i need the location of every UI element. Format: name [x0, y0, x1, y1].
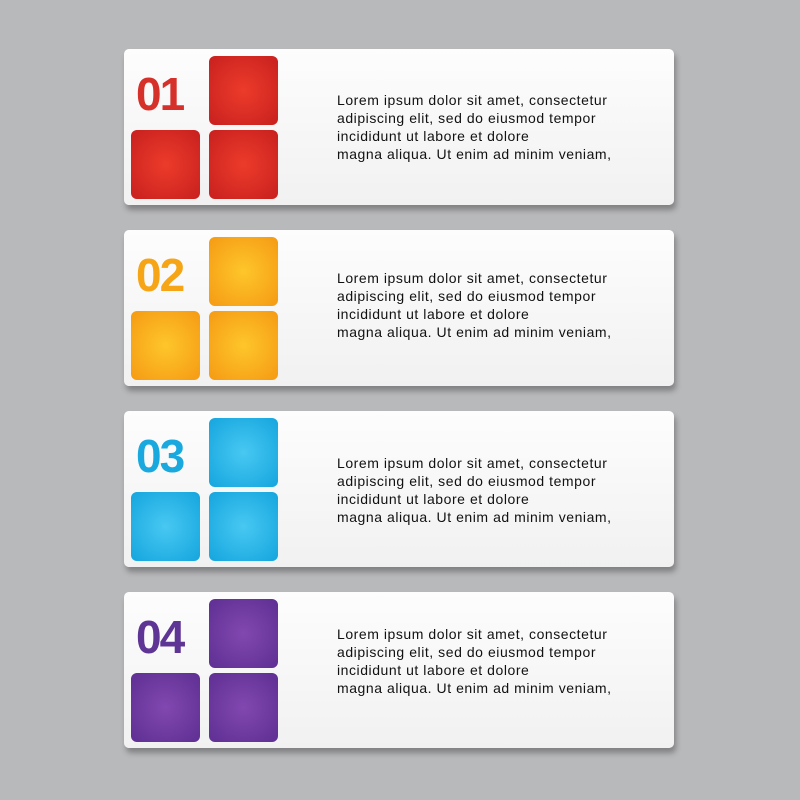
card 3 [124, 411, 674, 567]
text 1: magna aliqua. Ut enim ad minim veniam, [337, 146, 612, 162]
text 4: Lorem ipsum dolor sit amet, consectetur [337, 626, 607, 642]
text 1: adipiscing elit, sed do eiusmod tempor [337, 110, 596, 126]
text 4: incididunt ut labore et dolore [337, 662, 529, 678]
text 2: Lorem ipsum dolor sit amet, consectetur [337, 270, 607, 286]
text 2: incididunt ut labore et dolore [337, 306, 529, 322]
text 4: magna aliqua. Ut enim ad minim veniam, [337, 680, 612, 696]
number 03: 03 [136, 430, 183, 482]
text 4 [337, 626, 612, 696]
squares 4 [131, 599, 278, 742]
number 04: 04 [136, 611, 183, 663]
text 3: magna aliqua. Ut enim ad minim veniam, [337, 509, 612, 525]
text 2 [337, 270, 612, 340]
text 1: Lorem ipsum dolor sit amet, consectetur [337, 92, 607, 108]
squares 2 [131, 237, 278, 380]
text 4: adipiscing elit, sed do eiusmod tempor [337, 644, 596, 660]
text 3: adipiscing elit, sed do eiusmod tempor [337, 473, 596, 489]
card 1 [124, 49, 674, 205]
squares 3 [131, 418, 278, 561]
card 2 [124, 230, 674, 386]
text 3 [337, 455, 612, 525]
card 4 [124, 592, 674, 748]
text 3: incididunt ut labore et dolore [337, 491, 529, 507]
number 01: 01 [136, 68, 183, 120]
text 1: incididunt ut labore et dolore [337, 128, 529, 144]
text 2: magna aliqua. Ut enim ad minim veniam, [337, 324, 612, 340]
squares 1 [131, 56, 278, 199]
text 1 [337, 92, 612, 162]
number 02: 02 [136, 249, 183, 301]
text 2: adipiscing elit, sed do eiusmod tempor [337, 288, 596, 304]
text 3: Lorem ipsum dolor sit amet, consectetur [337, 455, 607, 471]
